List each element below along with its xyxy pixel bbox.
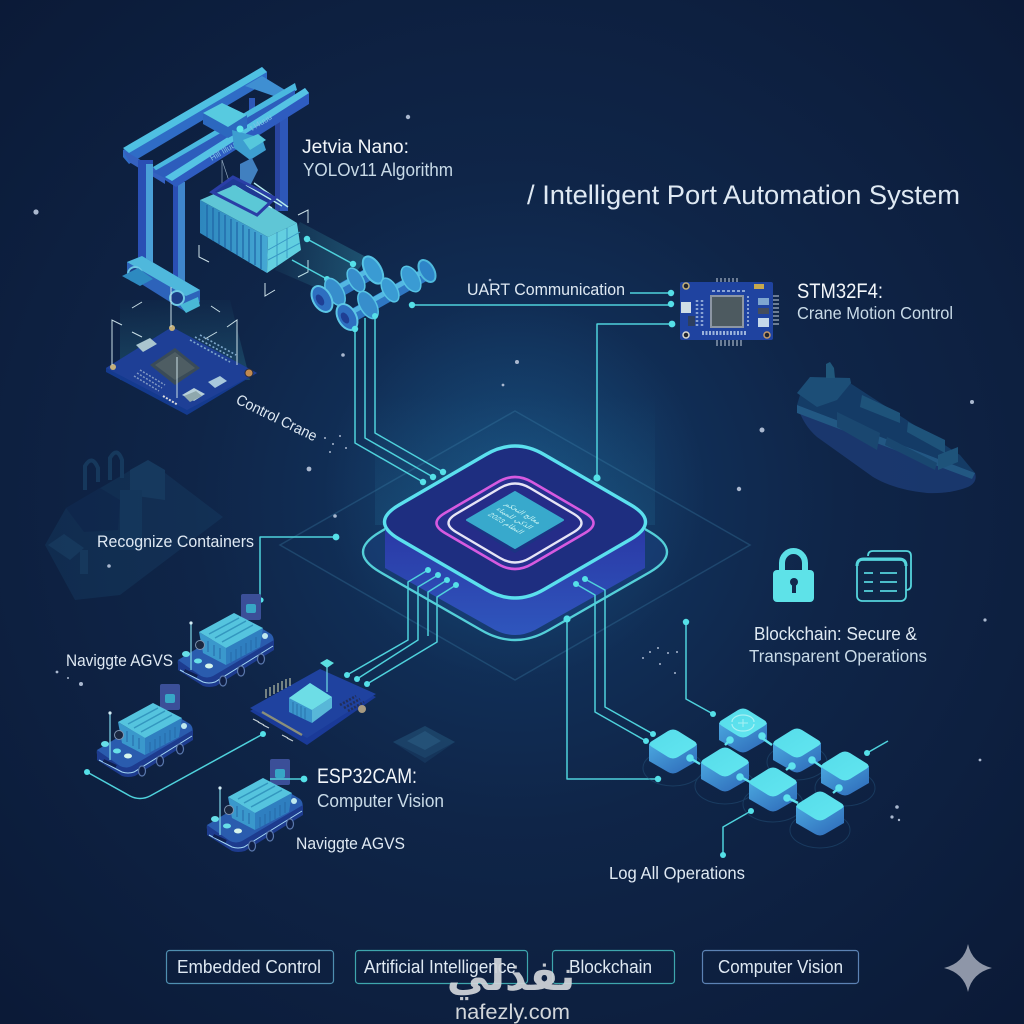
central processor platform (363, 446, 667, 640)
chip caption (485, 501, 544, 535)
crane trolley and hoist (203, 103, 266, 190)
icon: AGV with container (top) (178, 594, 274, 687)
text: ESP32CAM label (317, 765, 444, 811)
text: Blockchain description: Transparent Operations (749, 646, 927, 666)
background scene: faint chip (393, 726, 455, 763)
chip caption: الذكي للميناء (494, 506, 536, 530)
background scene: container ship (797, 362, 976, 493)
shipping container on spreader (200, 177, 301, 273)
chip caption: معالج التحكم (502, 501, 544, 525)
connector line: Recognize Containers (258, 534, 339, 603)
block (796, 792, 844, 836)
star dots (33, 115, 987, 821)
text: Log All Operations: Log All Operations (609, 863, 745, 883)
white ring (448, 484, 582, 562)
text: UART Communication: UART Communication (467, 280, 625, 299)
vision beam (275, 222, 368, 296)
watermark: nafezly.com (455, 1001, 570, 1024)
text: Jetson Nano label (302, 137, 453, 180)
text: ESP32CAM label: ESP32CAM: (317, 765, 417, 788)
block side walls (385, 522, 645, 635)
text: STM32F4 label: Crane Motion Control (797, 303, 953, 323)
block (821, 752, 869, 796)
block connectors (687, 733, 842, 803)
crane front beams: t l4uuu (248, 113, 274, 133)
crane front beams: Hill Illuu (208, 141, 237, 163)
icon: AGV with container (bottom) (207, 759, 303, 852)
container recognition brackets (199, 210, 308, 296)
text: Jetson Nano label: Jetvia Nano: (302, 137, 409, 158)
crane rear legs (249, 98, 288, 211)
watermark (447, 951, 575, 1024)
connector lines: chip to ESP32 (344, 567, 459, 687)
tag: Artificial Intelligence (356, 950, 528, 984)
central glow (325, 300, 705, 680)
faint network diamond (280, 411, 750, 680)
tag: Embedded Control (166, 950, 334, 984)
highlighted block (719, 708, 767, 752)
text: STM32F4 label (797, 280, 953, 323)
crane front legs (138, 160, 185, 288)
block halos (643, 744, 875, 848)
icon: ESP32CAM board (250, 659, 376, 745)
chip caption: النظام 2023 (486, 511, 526, 535)
icon: padlock (773, 551, 814, 602)
block (749, 768, 797, 812)
icon: ledger stack (857, 551, 911, 601)
tag: Artificial Intelligence: Artificial Intelligence (364, 956, 516, 977)
watermark: نفذلي (447, 951, 575, 1001)
icon: Jetson Nano board (106, 325, 257, 415)
text: title: / Intelligent Port Automation System (527, 180, 960, 210)
text: STM32F4 label: STM32F4: (797, 280, 883, 303)
text: ESP32CAM label: Computer Vision (317, 790, 444, 811)
icon: sparkle star (944, 944, 992, 992)
pink ring (436, 477, 594, 569)
tag: Blockchain: Blockchain (569, 956, 652, 977)
connector lines: rollers to central chip (352, 313, 446, 485)
block (701, 748, 749, 792)
crane base and wheels (122, 256, 200, 313)
block top ring (384, 446, 646, 598)
connector lines: container to rollers (292, 236, 356, 282)
tag: Blockchain (552, 950, 674, 984)
block (773, 728, 821, 772)
connector line: AGV to ESP32 (84, 731, 266, 798)
icon: STM32F4 board (680, 278, 779, 346)
text: Recognize Containers: Recognize Containers (97, 532, 254, 551)
connector lines: chip to blockchain (563, 576, 888, 858)
text: Jetson Nano label: YOLOv11 Algorithm (303, 159, 453, 180)
blockchain block network (643, 708, 875, 848)
connector lines: UART to STM32 (409, 290, 675, 482)
connector line: ESP32CAM label (270, 776, 307, 782)
icon: cable rollers (307, 253, 439, 334)
icon: AGV with container (left) (97, 684, 193, 777)
platform base outline (363, 464, 667, 640)
tag: Computer Vision: Computer Vision (718, 956, 843, 977)
crane rear rails (123, 67, 290, 184)
icon: gantry crane (122, 67, 309, 313)
tag: Embedded Control: Embedded Control (177, 956, 321, 977)
crane front beams (153, 83, 309, 187)
tag: Computer Vision (702, 950, 858, 984)
Jetson detection brackets (112, 287, 237, 398)
text: Blockchain description: Blockchain: Secure & (754, 624, 917, 644)
core chip (467, 492, 563, 553)
jetson board glow (120, 300, 250, 380)
text: Control Crane: Control Crane (233, 391, 320, 445)
block (649, 730, 697, 774)
text: Navigate AGVS lower: Naviggte AGVS (296, 835, 405, 853)
background scene: factory silhouette (45, 452, 223, 600)
text: Blockchain description (749, 624, 927, 666)
text: Navigate AGVS upper: Naviggte AGVS (66, 652, 173, 670)
